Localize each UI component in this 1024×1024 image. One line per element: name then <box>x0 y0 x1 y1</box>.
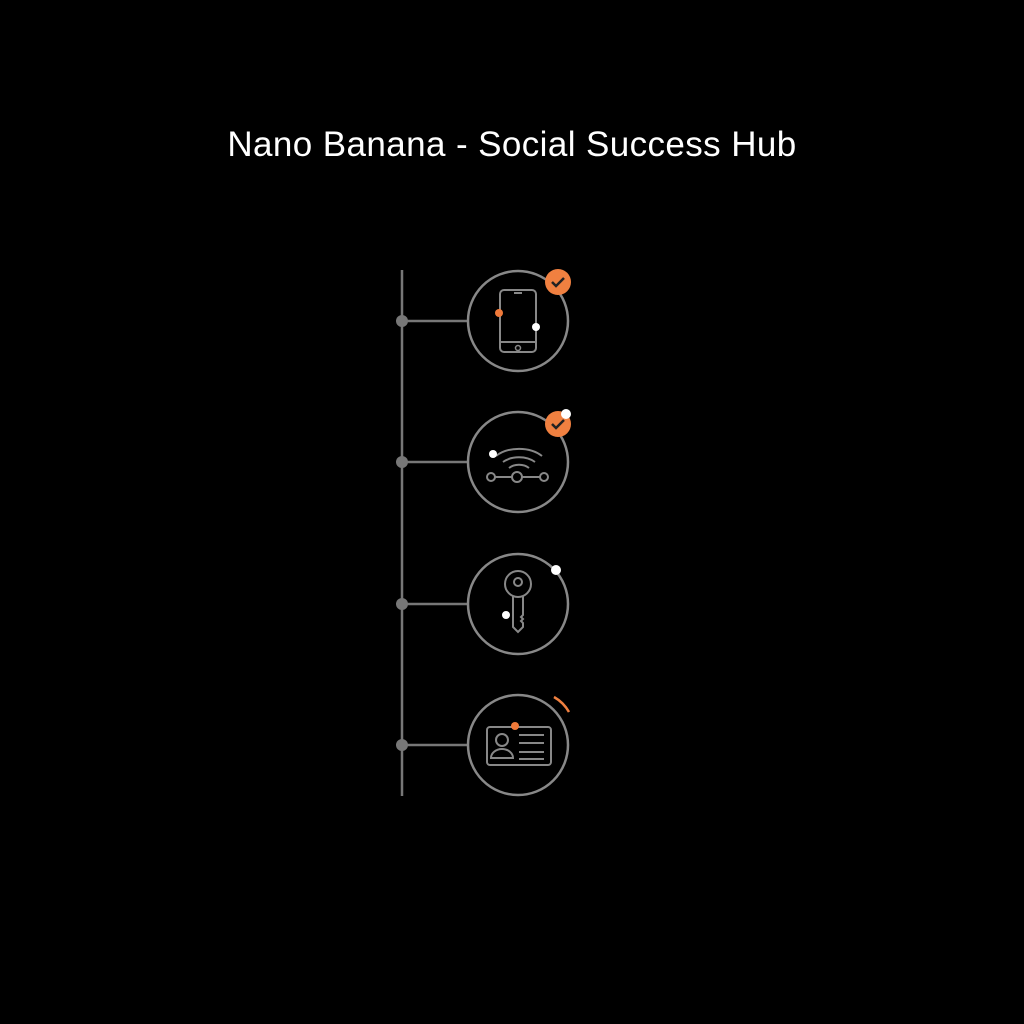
node: id card <box>468 695 569 795</box>
node: key <box>468 554 568 654</box>
node: phone <box>468 269 571 371</box>
timeline <box>396 270 468 796</box>
title: Nano Banana - Social Success Hub <box>227 125 797 164</box>
node: network <box>468 409 571 512</box>
